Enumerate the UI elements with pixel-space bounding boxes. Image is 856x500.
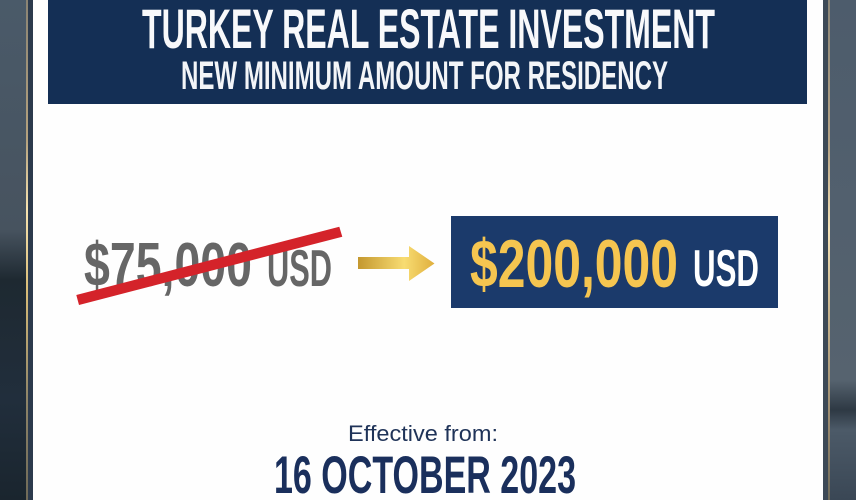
- effective date: [274, 421, 576, 500]
- old price: $75,000: [84, 231, 252, 300]
- new price: $200,000: [470, 226, 678, 302]
- arrow: gold: [358, 246, 434, 281]
- left gold line: [26, 0, 28, 500]
- red strike line: [76, 227, 342, 305]
- left background strip: [0, 0, 34, 500]
- effective label: Effective from:: [348, 421, 498, 446]
- right background strip: [822, 0, 856, 500]
- new amount box: [451, 216, 778, 308]
- new price currency: USD: [693, 240, 759, 298]
- header banner: [48, 0, 807, 104]
- old price currency: USD: [267, 240, 332, 298]
- old amount struck through: [76, 227, 342, 305]
- right gold line: [828, 0, 830, 500]
